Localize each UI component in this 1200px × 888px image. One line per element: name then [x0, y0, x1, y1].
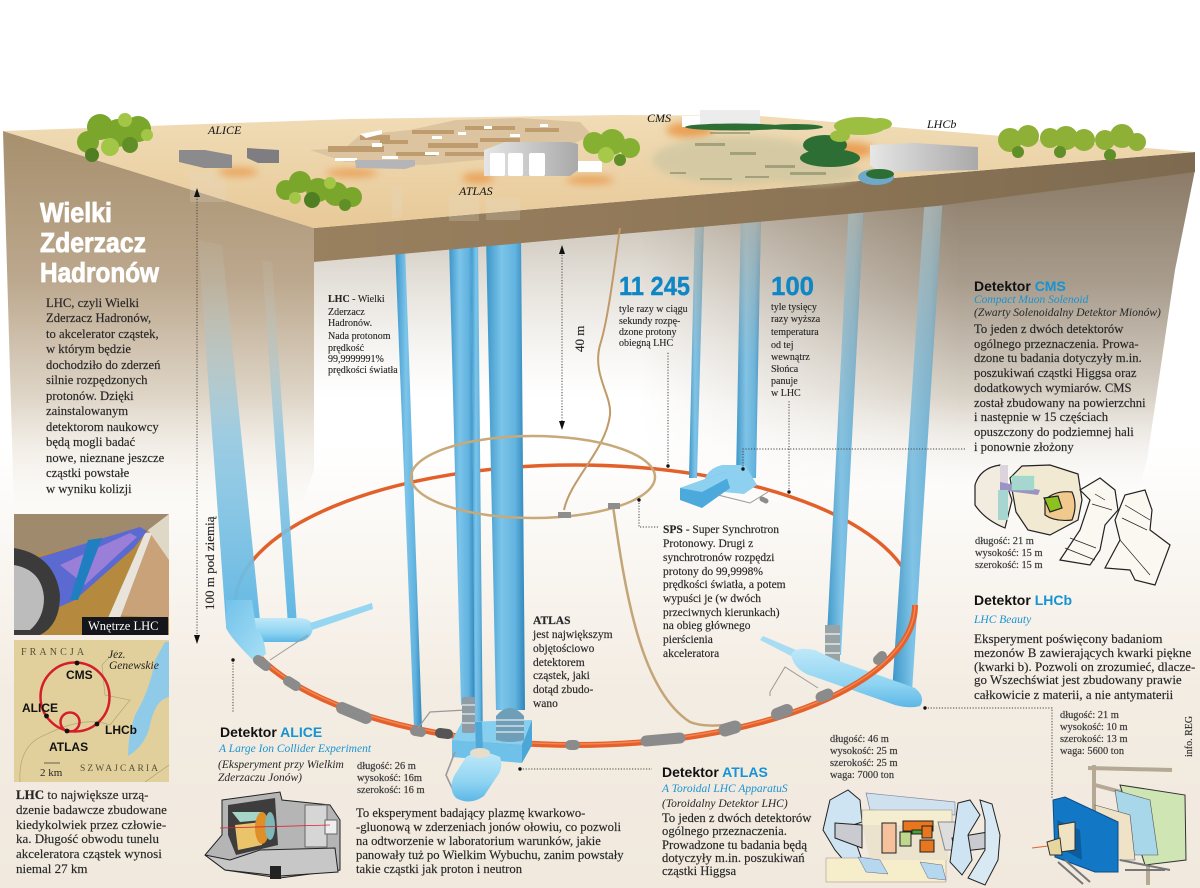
body: został zbudowany na powierzchni	[974, 396, 1146, 410]
ceiling	[14, 514, 169, 560]
site labels	[207, 111, 956, 198]
stat: 100: panuje	[771, 376, 798, 387]
subtitle: Compact Muon Solenoid	[974, 294, 1089, 306]
text: ATLAS dimensions: waga: 7000 ton	[830, 770, 895, 781]
yellow supports	[862, 810, 952, 828]
illustration: ALICE detector	[205, 792, 340, 879]
labels: LHCb	[105, 723, 137, 737]
text: ALICE body: panowały tuż po Wielkim Wybuchu, zanim powstały	[356, 848, 624, 862]
stat: 11 245: 11 245	[619, 271, 690, 301]
text: intro: zainstalowanym	[46, 404, 128, 418]
stat: 100: 100	[771, 271, 814, 301]
LHC ring	[40, 662, 110, 732]
text: intro: dochodziło do zderzeń	[46, 358, 161, 372]
caption: Wnętrze LHC	[88, 619, 158, 633]
text: LHC note: Nada protonom	[328, 331, 391, 342]
ring: front half of LHC	[235, 604, 915, 745]
text: SPS	[663, 524, 786, 660]
translation: (Eksperyment przy Wielkim	[218, 759, 344, 771]
text: LHCb dimensions: wysokość: 10 m	[1060, 722, 1128, 733]
magnet opening	[1057, 820, 1082, 860]
label: ATLAS: ATLAS	[458, 184, 493, 198]
text: intro: w wyniku kolizji	[46, 482, 132, 496]
block	[680, 472, 730, 508]
body: dodatkowych wymiarów. CMS	[974, 381, 1132, 395]
right box	[938, 822, 958, 850]
text: intro: nowe, nieznane jeszcze	[46, 451, 165, 465]
building: mid	[355, 160, 415, 169]
translation	[218, 759, 344, 784]
green panels	[1120, 785, 1186, 865]
text: LHCb dimensions: waga: 5600 ton	[1060, 746, 1125, 757]
right blocks	[305, 805, 327, 847]
body: i ponownie złożony	[974, 440, 1074, 454]
subtitle: A Toroidal LHC ApparatuS	[661, 783, 788, 795]
text: LHC summary: akceleratora cząstek wynosi	[16, 846, 162, 861]
body: Prowadzone tu badania będą	[662, 838, 807, 852]
text: intro: silnie rozpędzonych	[46, 373, 148, 387]
text: ATLAS dimensions: wysokość: 25 m	[830, 746, 898, 757]
people	[270, 866, 281, 879]
terrain specks	[670, 132, 836, 180]
CMS cavern	[680, 465, 768, 508]
text: LHC summary: niemal 27 km	[16, 861, 88, 876]
text: LHCb dimensions: długość: 21 m	[1060, 710, 1119, 721]
text: SPS: pierścienia	[663, 634, 713, 646]
text: intro: cząstki powstałe	[46, 466, 130, 480]
text: ATLAS	[661, 764, 812, 878]
text: LHC summary	[16, 787, 167, 876]
tube highlight	[60, 533, 137, 585]
body: i następnie w 15 częściach	[974, 410, 1109, 424]
illustration: ATLAS detector	[823, 790, 1000, 885]
band under surface	[314, 152, 1195, 262]
stat: 11 245: sekundy rozpę-	[619, 316, 680, 327]
leader dots	[231, 464, 927, 771]
building: LHCb	[870, 143, 978, 172]
wire handles	[446, 752, 462, 788]
body: go Wszechświat jest zbudowany prawie	[974, 672, 1182, 687]
dome	[704, 465, 757, 494]
walkway white	[108, 533, 152, 618]
shaft: ALICE	[198, 240, 262, 640]
text: SPS: prędkości światła, a potem	[663, 579, 786, 591]
stat: 100	[771, 271, 821, 399]
trees: right group	[998, 124, 1146, 161]
surface: ground	[3, 110, 1195, 228]
supports	[1058, 860, 1170, 884]
blue feet	[858, 857, 888, 874]
stat: 11 245: obiegną LHC	[619, 338, 673, 349]
stat: 11 245: dzone protony	[619, 327, 676, 338]
body: poszukiwań cząstki Higgsa oraz	[974, 366, 1137, 380]
photo base	[14, 514, 169, 635]
leader: ATLAS	[520, 768, 652, 770]
text: ALICE	[218, 724, 372, 784]
heading: Detektor LHCb	[974, 592, 1072, 608]
text: ATLAS note: objętościowo	[533, 643, 595, 655]
wire loops	[770, 667, 818, 696]
body: ogólnego przeznaczenia.	[662, 824, 787, 838]
trees: centre group	[583, 129, 640, 166]
body: Eksperyment poświęcony badaniom	[974, 631, 1162, 646]
building: ALICE small	[247, 148, 279, 163]
text: ALICE dimensions	[357, 761, 425, 796]
side capsule	[250, 618, 313, 642]
text: SPS: protony do 99,9998%	[663, 566, 763, 578]
text: SPS: wypuści je (w dwóch	[663, 593, 761, 605]
body: To jeden z dwóch detektorów	[662, 811, 812, 825]
border	[20, 650, 169, 782]
stat: 100: od tej	[771, 340, 794, 351]
text: SPS: na obieg głównego	[663, 620, 751, 632]
text: LHC note: LHC - Wielki	[328, 294, 385, 305]
text: intro: detektorom naukowcy	[46, 420, 159, 434]
text: ALICE body: -gluonową w zderzeniach jonów ołowiu, co pozwoli	[356, 820, 622, 834]
text: CMS dimensions: szerokość: 15 m	[975, 560, 1043, 571]
text: intro: to akcelerator cząstek,	[46, 327, 159, 341]
text: SPS: Protonowy. Drugi z	[663, 538, 753, 550]
neck plate	[470, 748, 490, 758]
text: LHC note: prędkość	[328, 343, 365, 354]
title	[40, 197, 159, 288]
shaft: ATLAS thin	[471, 240, 483, 755]
leader: 11 245	[667, 352, 669, 466]
orange soil patches	[218, 122, 874, 184]
base	[205, 848, 338, 876]
scale bar	[44, 762, 60, 764]
body: ogólnego przeznaczenia. Prowa-	[974, 337, 1139, 351]
translation: (Toroidalny Detektor LHC)	[662, 798, 788, 810]
labels: SZWAJCARIA	[80, 764, 160, 774]
text: intro: Zderzacz Hadronów,	[46, 311, 151, 325]
text: ALICE dimensions: szerokość: 16 m	[357, 785, 425, 796]
right wall	[672, 172, 1195, 466]
building: CMS	[682, 110, 760, 127]
shaft: LHCb thin	[826, 203, 864, 655]
transfer line upper	[564, 228, 620, 510]
stat: 100: tyle tysięcy	[771, 302, 817, 313]
labels	[21, 647, 160, 779]
right cone	[952, 832, 990, 852]
text: LHC note: 99,9999991%	[328, 354, 384, 365]
body	[662, 811, 812, 878]
leader: LHCb	[925, 708, 1052, 798]
arrow: 100 m depth	[194, 188, 217, 644]
lake	[128, 642, 169, 756]
wire loops	[270, 635, 308, 660]
stat: 100: w LHC	[771, 388, 801, 399]
labels: 2 km	[40, 767, 63, 779]
frame	[1088, 765, 1172, 885]
text: SPS: synchrotronów rozpędzi	[663, 552, 774, 564]
subtitle: LHC Beauty	[973, 614, 1032, 626]
labels: ALICE	[22, 701, 58, 715]
heading: Detektor CMS	[974, 278, 1066, 294]
vertex box	[1058, 822, 1075, 852]
flange	[14, 548, 60, 635]
text: SPS: akceleratora	[663, 648, 719, 660]
LHCb cavern	[760, 625, 922, 707]
text: CMS dimensions	[975, 536, 1043, 571]
sage terrain near CMS	[652, 136, 860, 184]
text: CMS dimensions: wysokość: 15 m	[975, 548, 1043, 559]
teal ring	[265, 812, 275, 840]
floor	[112, 525, 169, 618]
capsule main	[791, 649, 922, 707]
body: opuszczony do podziemnej hali	[974, 425, 1134, 439]
text: ALICE dimensions: wysokość: 16m	[357, 773, 422, 784]
arrow: 40 m	[559, 245, 587, 430]
title: Wielki	[40, 197, 112, 228]
text: LHC summary: LHC to największe urzą-	[16, 787, 148, 802]
SPS ring	[411, 436, 655, 518]
text: ATLAS note	[532, 615, 613, 710]
illustration: LHCb detector	[1032, 765, 1186, 885]
land	[14, 640, 169, 782]
shaft: ATLAS twin	[449, 240, 475, 705]
labels: CMS	[66, 668, 93, 682]
orange ring	[255, 812, 269, 844]
shaft: thin left	[395, 245, 422, 728]
subtitle: A Large Ion Collider Experiment	[218, 743, 372, 755]
tan panel	[1095, 805, 1135, 860]
labels: Jez.	[108, 649, 126, 661]
text: ALICE body	[356, 806, 624, 876]
trees: front group	[276, 171, 362, 211]
silo on shaft	[825, 625, 840, 662]
leader: SPS	[639, 500, 658, 527]
top face	[452, 720, 532, 745]
labels: ATLAS	[49, 740, 88, 754]
beam	[220, 825, 330, 828]
shaft: CMS large	[736, 212, 761, 478]
town highlights	[335, 124, 548, 161]
text: LHC note: Hadronów.	[328, 318, 372, 329]
text: ATLAS note: ATLAS	[533, 615, 570, 627]
left wheel	[823, 790, 862, 870]
beam	[1032, 846, 1048, 848]
leader: 100	[788, 400, 790, 492]
text: SPS: SPS - Super Synchrotron	[663, 524, 779, 536]
text: LHC note: Zderzacz	[328, 307, 365, 318]
text: intro: w którym będzie	[46, 342, 131, 356]
silo large	[496, 708, 524, 742]
wire	[718, 492, 768, 503]
building: ALICE	[179, 150, 232, 168]
main body	[205, 792, 340, 878]
translation: (Zwarty Solenoidalny Detektor Mionów)	[974, 307, 1161, 319]
upper frame	[866, 793, 955, 815]
text: CMS dimensions: długość: 21 m	[975, 536, 1034, 547]
photo: LHC interior	[14, 514, 169, 635]
text: LHC summary: kiedykolwiek przez człowie-	[16, 817, 166, 832]
label: LHCb: LHCb	[926, 117, 956, 131]
SPS ring and transfer lines	[411, 228, 725, 726]
shaft ghosts through ground	[190, 172, 520, 221]
shaft: ATLAS large	[486, 236, 525, 710]
caption box	[82, 617, 168, 635]
stat: 100: razy wyższa	[771, 314, 821, 325]
stat: 100: temperatura	[771, 327, 819, 338]
silo small	[462, 697, 475, 733]
text: ATLAS note: dotąd zbudo-	[533, 684, 594, 696]
ground plane	[3, 115, 1195, 228]
town blocks	[310, 118, 592, 165]
capsule	[451, 752, 501, 802]
text: LHC summary: ka. Długość obwodu tunelu	[16, 831, 159, 846]
text: intro: będą mogli badać	[46, 435, 136, 449]
teal	[232, 812, 262, 822]
SPS magnets	[558, 512, 571, 518]
blue bands	[70, 538, 102, 600]
magnet	[1053, 797, 1118, 872]
ring magnets	[258, 499, 882, 745]
stat: 100: wewnątrz	[771, 352, 810, 363]
text: LHC note	[328, 294, 398, 376]
text: ATLAS dimensions	[830, 734, 898, 781]
text: LHC summary: dzenie badawcze zbudowane	[16, 802, 167, 817]
building: ATLAS	[484, 142, 602, 176]
trees: left group	[77, 113, 153, 162]
shaft: ALICE thin	[262, 260, 297, 625]
leader: CMS	[743, 449, 965, 469]
inner dark	[228, 798, 278, 855]
ATLAS cavern	[446, 697, 532, 802]
text: ATLAS note: jest największym	[532, 629, 613, 641]
blue panel	[1115, 790, 1158, 855]
text: SPS: przeciwnych kierunkach)	[663, 607, 780, 619]
pipe	[760, 636, 796, 657]
title: Zderzacz	[40, 227, 146, 258]
front face	[452, 740, 522, 763]
elbow	[226, 600, 266, 662]
pipe	[310, 603, 373, 630]
text: ALICE body: takie cząstki jak proton i neutron	[356, 862, 523, 876]
map	[14, 640, 169, 782]
shaft: CMS thin	[689, 218, 704, 478]
dark vegetation CMS	[685, 124, 894, 179]
left wall	[3, 131, 314, 510]
leader lines	[231, 352, 1052, 798]
text: intro: protonów. Dzięki	[46, 389, 134, 403]
labels: FRANCJA	[21, 647, 87, 658]
text: ATLAS note: cząstek, jaki	[533, 670, 590, 682]
text: ATLAS note: detektorem	[533, 657, 585, 669]
shaft group	[395, 195, 943, 755]
points	[44, 661, 99, 733]
body: To jeden z dwóch detektorów	[974, 322, 1124, 336]
shaft top fade	[689, 195, 943, 692]
right wheels	[950, 800, 980, 875]
heading: Detektor ATLAS	[662, 764, 768, 780]
town shadows	[328, 126, 559, 156]
ATLAS wire loops	[418, 710, 466, 728]
yellow core	[235, 822, 262, 850]
tube	[14, 527, 147, 620]
ring: back half of LHC	[235, 465, 915, 605]
inner tan	[862, 825, 950, 860]
credit: info. REG	[1184, 716, 1195, 757]
text: ALICE dimensions: długość: 26 m	[357, 761, 416, 772]
core orange	[882, 823, 896, 853]
ALICE cavern	[226, 600, 373, 662]
arrow: 100 m depth: 100 m pod ziemią	[202, 516, 217, 610]
heading: Detektor ALICE	[220, 724, 322, 740]
illustration: CMS detector	[975, 465, 1170, 585]
SPS ring	[60, 712, 80, 732]
stat: 100: Słońca	[771, 364, 799, 375]
text: LHCb	[973, 592, 1195, 702]
shaft: LHCb large	[892, 195, 943, 692]
transfer line lower	[613, 506, 725, 726]
town base	[310, 118, 592, 165]
water pond	[858, 169, 894, 185]
leader: ALICE	[232, 660, 234, 712]
translation: Zderzaczu Jonów)	[218, 772, 302, 784]
body: cząstki Higgsa	[662, 864, 736, 878]
body: (kwarki b). Pozwoli on zrozumieć, dlacze-	[974, 659, 1195, 674]
text: ALICE body: na odtworzenie w laboratorium warunków, jakie	[356, 834, 601, 848]
labels: Genewskie	[109, 660, 159, 672]
body	[974, 631, 1195, 702]
text: ATLAS dimensions: długość: 46 m	[830, 734, 889, 745]
body	[974, 322, 1146, 454]
arrow: 40 m: 40 m	[572, 326, 587, 352]
text: ATLAS dimensions: szerokość: 25 m	[830, 758, 898, 769]
text: ALICE body: To eksperyment badający plazmę kwarkowo-	[356, 806, 585, 820]
back wall shading	[314, 200, 1000, 470]
left cone	[835, 823, 862, 848]
trees: back group	[830, 117, 892, 142]
text: LHCb dimensions: szerokość: 13 m	[1060, 734, 1128, 745]
body: dotyczyły m.in. poszukiwań	[662, 851, 805, 865]
side face	[522, 720, 532, 763]
text: CMS	[974, 278, 1161, 454]
label: ALICE: ALICE	[207, 123, 242, 137]
text: LHC note: prędkości światła	[328, 365, 398, 376]
text: intro	[46, 296, 165, 496]
label: CMS: CMS	[647, 111, 671, 125]
wall light	[148, 514, 169, 560]
body: mezonów B zawierających kwarki piękne	[974, 645, 1192, 660]
text: intro: LHC, czyli Wielki	[46, 296, 139, 310]
body: dzone tu badania dotyczyły m.in.	[974, 351, 1142, 365]
shaft end thin	[475, 722, 483, 752]
text: ATLAS note: wano	[533, 698, 558, 710]
stat: 11 245	[619, 271, 690, 349]
text: LHCb dimensions	[1060, 710, 1128, 757]
stat: 11 245: tyle razy w ciągu	[619, 304, 688, 315]
title: Hadronów	[40, 257, 159, 288]
body: całkowicie z materii, a nie antymaterii	[974, 687, 1174, 702]
